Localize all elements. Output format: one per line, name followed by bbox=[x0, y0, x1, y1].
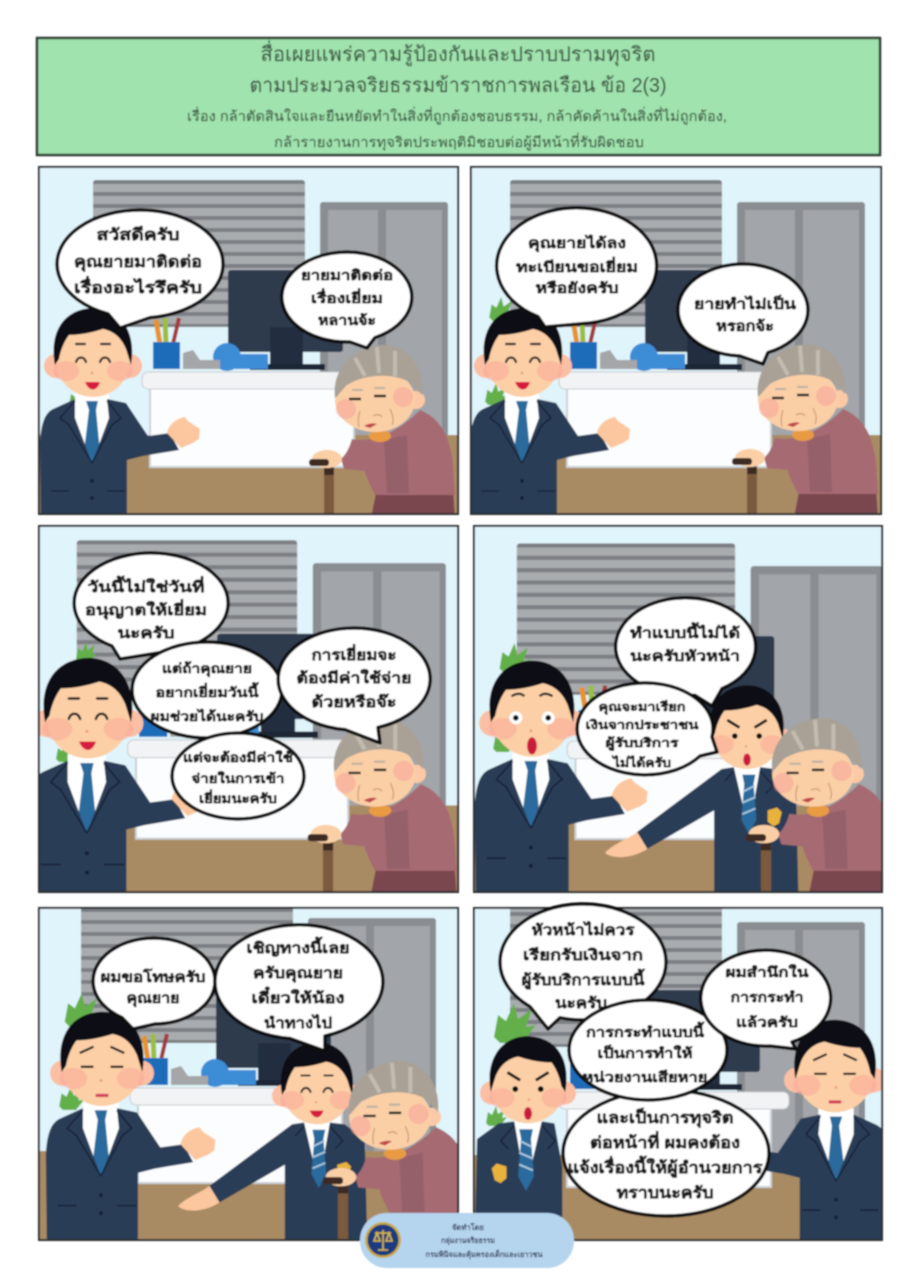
supervisor angry and pointing bbox=[605, 685, 799, 906]
speech bubble: officer greeting bbox=[57, 210, 223, 328]
speech bubble: supervisor regret: ผมสำนึกใน bbox=[726, 963, 809, 980]
speech bubble: grandmother asks about cost bbox=[278, 628, 430, 743]
officer smiling bbox=[28, 658, 209, 912]
speech bubble: corruption will be reported: ต่อหน้าที่ ผมคงต้อง bbox=[590, 1131, 740, 1152]
speech bubble: not a visiting day: นะครับ bbox=[118, 625, 174, 642]
speech bubble: apology: ผมขอโทษครับ bbox=[100, 968, 206, 986]
speech bubble: officer greeting: เรื่องอะไรรึครับ bbox=[74, 276, 202, 297]
speech bubble: corruption will be reported: ทราบนะครับ bbox=[616, 1184, 714, 1202]
panel 1: greeting bbox=[0, 167, 580, 535]
speech bubble: grandmother asks about cost: ด้วยหรือจ๊ะ bbox=[312, 693, 396, 711]
speech bubble: officer can help bbox=[132, 642, 282, 738]
speech bubble: officer objects: ทำแบบนี้ไม่ได้ bbox=[630, 622, 740, 642]
speech bubble: officer question: คุณยายได้ลง bbox=[528, 234, 626, 252]
speech bubble: officer can help: แต่ถ้าคุณยาย bbox=[162, 661, 252, 677]
speech bubble: grandmother asks about cost: ต้องมีค่าใช้จ่าย bbox=[296, 669, 412, 687]
grandmother bbox=[308, 718, 457, 896]
speech bubble: cannot collect money: คุณจะมาเรียก bbox=[598, 700, 686, 715]
panel 6: supervisor reports corruption bbox=[357, 900, 915, 1266]
subtitle line 2: กล้ารายงานการทุจริตประพฤติมิชอบต่อผู้มีหน้าที่รับผิดชอบ bbox=[274, 133, 644, 151]
officer smiling bbox=[40, 308, 200, 533]
speech bubble: grandmother reply: ยายทำไม่เป็น bbox=[694, 294, 796, 313]
title line 2: ตามประมวลจริยธรรมข้าราชการพลเรือน ข้อ 2(3) bbox=[250, 75, 666, 97]
speech bubble: apology: คุณยาย bbox=[126, 991, 180, 1007]
credit text: จัดทำโดย bbox=[452, 1223, 484, 1232]
speech bubble: corruption will be reported: และเป็นการทุจริต bbox=[596, 1106, 734, 1128]
speech bubble: damages the agency: เป็นการทำให้ bbox=[598, 1044, 692, 1061]
speech bubble: grandmother reply: หลานจ้ะ bbox=[318, 312, 376, 328]
speech bubble: cannot collect money: ผู้รับบริการ bbox=[606, 736, 679, 751]
credit text: กลุ่มงานจริยธรรม bbox=[441, 1236, 495, 1245]
panel 5: supervisor apologises bbox=[0, 896, 568, 1259]
speech bubble: officer question: หรือยังครับ bbox=[536, 280, 618, 297]
speech bubble: not a visiting day bbox=[74, 553, 228, 659]
speech bubble: supervisor regret: แล้วครับ bbox=[736, 1014, 798, 1030]
officer apologetic bbox=[46, 1012, 215, 1250]
speech bubble: apology bbox=[93, 938, 215, 1029]
speech bubble: supervisor regret bbox=[701, 950, 831, 1049]
speech bubble: corruption will be reported: แจ้งเรื่องนี้ให้ผู้อำนวยการ bbox=[568, 1155, 763, 1179]
speech bubble: should not collect money: เรียกรับเงินจาก bbox=[523, 946, 643, 964]
icon: agency seal bbox=[365, 1222, 401, 1258]
speech bubble: grandmother asks about cost: การเยี่ยมจะ bbox=[312, 644, 396, 664]
speech bubble: should not collect money bbox=[500, 904, 666, 1029]
speech bubble: not a visiting day: อนุญาตให้เยี่ยม bbox=[85, 599, 207, 620]
speech bubble: this way please: เดี๋ยวให้น้อง bbox=[252, 986, 344, 1007]
speech bubble: should not collect money: นะครับ bbox=[555, 995, 607, 1012]
speech bubble: grandmother reply bbox=[282, 252, 412, 348]
speech bubble: officer greeting: สวัสดีครับ bbox=[96, 225, 180, 244]
speech bubble: not a visiting day: วันนี้ไม่ใช่วันที่ bbox=[88, 575, 205, 596]
speech bubble: grandmother reply: ยายมาติดต่อ bbox=[301, 267, 393, 283]
credit text bbox=[426, 1223, 542, 1259]
speech bubble: this way please bbox=[215, 925, 383, 1051]
panel 2: registration question bbox=[357, 167, 915, 535]
speech bubble: there is a fee: เยี่ยมนะครับ bbox=[199, 789, 277, 806]
speech bubble: officer question: ทะเบียนขอเยี่ยม bbox=[516, 256, 638, 276]
speech bubble: grandmother reply: เรื่องเยี่ยม bbox=[311, 288, 383, 306]
supervisor regretful bbox=[724, 1020, 890, 1254]
speech bubble: corruption will be reported bbox=[563, 1090, 769, 1216]
speech bubble: supervisor regret: การกระทำ bbox=[730, 989, 804, 1005]
speech bubble: grandmother reply: หรอกจ้ะ bbox=[716, 318, 774, 335]
panel 3: officer asks for a fee bbox=[0, 526, 583, 912]
speech bubble: officer greeting: คุณยายมาติดต่อ bbox=[74, 253, 202, 272]
grandmother bbox=[746, 718, 895, 896]
subtitle line 1: เรื่อง กล้าตัดสินใจและยืนหยัดทำในสิ่งที่ถูกต้องชอบธรรม, กล้าคัดค้านในสิ่งที่ไม่ถูกต้อง, bbox=[187, 107, 727, 125]
speech bubble: this way please: ครับคุณยาย bbox=[253, 965, 343, 983]
speech bubble: cannot collect money bbox=[577, 683, 717, 775]
header banner bbox=[37, 38, 880, 155]
panel 4: supervisor intervenes bbox=[359, 526, 915, 909]
speech bubble: cannot collect money: เงินจากประชาชน bbox=[586, 718, 699, 732]
speech bubble: should not collect money: หัวหน้าไม่ควร bbox=[532, 920, 636, 939]
officer angry bbox=[474, 1036, 576, 1266]
officer smiling bbox=[470, 308, 630, 533]
speech bubble: officer can help: อยากเยี่ยมวันนี้ bbox=[156, 682, 259, 700]
speech bubble: there is a fee: แต่จะต้องมีค่าใช้ bbox=[183, 749, 293, 765]
speech bubble: damages the agency bbox=[569, 1000, 727, 1100]
grandmother bbox=[323, 1061, 472, 1239]
speech bubble: there is a fee: จ่ายในการเข้า bbox=[192, 770, 284, 786]
grandmother bbox=[732, 344, 878, 519]
grandmother bbox=[309, 345, 455, 520]
speech bubble: officer objects: นะครับหัวหน้า bbox=[630, 648, 740, 665]
speech bubble: this way please: นำทางไป bbox=[264, 1013, 332, 1032]
speech bubble: officer can help: ผมช่วยได้นะครับ bbox=[150, 708, 264, 724]
speech bubble: officer objects bbox=[616, 598, 756, 706]
title line 1: สื่อเผยแพร่ความรู้ป้องกันและปราบปรามทุจริต bbox=[260, 40, 656, 67]
speech bubble: should not collect money: ผู้รับบริการแบบนี้ bbox=[522, 968, 645, 990]
credit text: กรมพินิจและคุ้มครองเด็กและเยาวชน bbox=[426, 1249, 542, 1259]
speech bubble: cannot collect money: ไม่ได้ครับ bbox=[611, 755, 671, 770]
footer credit badge bbox=[360, 1213, 574, 1268]
speech bubble: damages the agency: หน่วยงานเสียหาย bbox=[582, 1069, 708, 1085]
officer surprised bbox=[475, 661, 648, 904]
speech bubble: there is a fee bbox=[172, 733, 304, 819]
speech bubble: this way please: เชิญทางนี้เลย bbox=[246, 936, 350, 957]
speech bubble: officer question bbox=[497, 208, 657, 327]
speech bubble: damages the agency: การกระทำแบบนี้ bbox=[586, 1021, 705, 1040]
speech bubble: grandmother reply bbox=[678, 264, 808, 364]
supervisor guiding the way bbox=[178, 1042, 368, 1259]
